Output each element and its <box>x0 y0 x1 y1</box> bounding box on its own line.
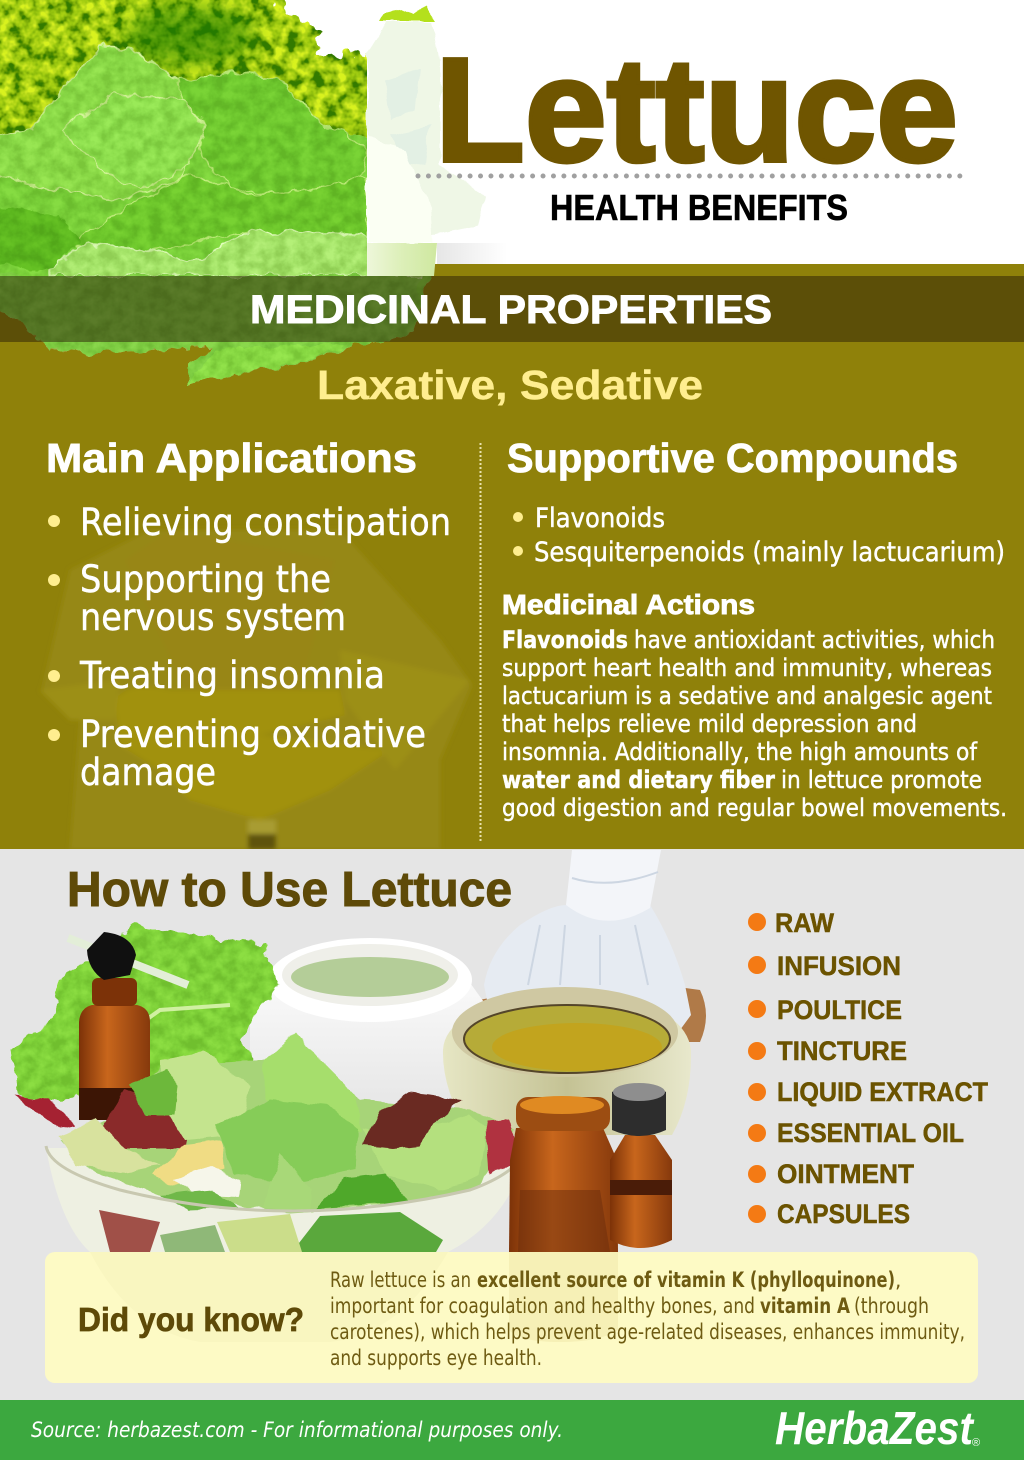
image: woman holding abdomen (faint) <box>40 530 472 849</box>
callout text: important for coagulation and healthy bones, and <box>330 1294 755 1318</box>
item: essential oil: ESSENTIAL OIL <box>777 1118 964 1148</box>
subtitle: HEALTH BENEFITS <box>550 187 848 228</box>
faint salad bowl through callout <box>90 1252 448 1342</box>
medicinal properties panel background <box>0 264 1024 849</box>
applications list: Relieving constipation <box>80 501 451 544</box>
shadow under lettuce <box>437 243 507 264</box>
callout text: and supports eye health. <box>330 1346 542 1370</box>
image: curly lettuce behind <box>0 0 380 160</box>
item: liquid extract: LIQUID EXTRACT <box>777 1077 988 1107</box>
medicinal actions paragraph: insomnia. Additionally, the high amounts of <box>502 738 977 766</box>
glass rim <box>46 1142 528 1211</box>
glass bowl <box>46 1148 528 1252</box>
usage forms list <box>748 908 988 1229</box>
image: dropper bottle <box>68 932 188 1120</box>
heading: main applications: Main Applications <box>46 435 417 481</box>
item: capsules: CAPSULES <box>777 1199 910 1229</box>
medicinal actions paragraph: that helps relieve mild depression and <box>502 710 917 738</box>
panel: how to use background <box>0 849 1024 1400</box>
image: herbal tea bowl <box>443 987 691 1135</box>
callout text <box>330 1268 965 1370</box>
white area right of lettuce <box>438 243 1024 264</box>
logo: HerbaZest: ® <box>972 1437 980 1449</box>
medicinal actions paragraph: Flavonoids <box>502 626 628 654</box>
medicinal actions paragraph: in lettuce promote <box>781 766 982 794</box>
panel: supportive compounds <box>502 435 1007 822</box>
footer bar <box>0 1400 1024 1460</box>
item: poultice: POULTICE <box>777 995 902 1025</box>
properties: Laxative, Sedative <box>317 362 703 408</box>
image: poultice bag in basket <box>479 850 706 1042</box>
source note: Source: herbazest.com - For informational purposes only. <box>31 1418 563 1442</box>
callout text: vitamin A <box>760 1294 851 1318</box>
medicinal actions paragraph: support heart health and immunity, whereas <box>502 654 992 682</box>
applications list: Treating insomnia <box>79 654 385 697</box>
applications list <box>48 501 451 794</box>
medicinal actions paragraph <box>502 626 1007 822</box>
applications list: damage <box>80 751 216 794</box>
image: cream jar <box>250 938 486 1110</box>
panel: main applications <box>46 435 451 794</box>
image: amber essential oil bottle <box>610 1083 672 1248</box>
section heading: MEDICINAL PROPERTIES <box>250 288 772 332</box>
washed-out lettuce under title panel <box>367 243 437 276</box>
curly lettuce dark centre <box>125 5 255 65</box>
image: romaine lettuce <box>0 47 437 383</box>
title: Lettuce <box>435 28 958 193</box>
image: faded lettuce behind title <box>367 22 486 243</box>
image: lettuce leaf <box>12 925 278 1100</box>
callout text: excellent source of vitamin K (phylloquinone) <box>477 1268 895 1292</box>
item: raw <box>748 908 834 938</box>
dotted title divider <box>418 174 960 178</box>
image: amber capsule jar <box>509 1096 618 1252</box>
applications list: Preventing oxidative <box>80 713 426 756</box>
heading: medicinal actions: Medicinal Actions <box>502 589 755 620</box>
salad leaves <box>14 1032 518 1210</box>
callout text: Raw lettuce is an <box>330 1268 471 1292</box>
logo: HerbaZest: HerbaZest <box>775 1402 974 1454</box>
compounds list: Flavonoids <box>535 503 665 534</box>
header background <box>0 0 1024 264</box>
item: ointment: OINTMENT <box>777 1159 914 1189</box>
curly lettuce tip above panel <box>379 6 435 21</box>
applications list: Supporting the <box>80 558 331 601</box>
callout text: , <box>895 1268 901 1292</box>
applications list: nervous system <box>80 596 346 639</box>
compounds list <box>513 503 1005 568</box>
medicinal actions paragraph: water and dietary fiber <box>502 766 775 794</box>
salad base <box>60 1035 515 1212</box>
item: infusion: INFUSION <box>777 951 901 981</box>
section band <box>0 276 1024 342</box>
callout: did you know <box>45 1252 978 1383</box>
heading: how to use: How to Use Lettuce <box>67 863 512 917</box>
callout text: (through <box>854 1294 929 1318</box>
faint jar through callout <box>509 1252 618 1342</box>
heading: supportive compounds: Supportive Compounds <box>507 435 958 481</box>
dotted column divider <box>480 443 482 843</box>
item: tincture: TINCTURE <box>777 1036 907 1066</box>
white title area <box>367 21 1024 243</box>
item: raw: RAW <box>775 908 834 938</box>
callout heading: Did you know? <box>78 1301 304 1338</box>
contents below rim <box>292 1212 443 1252</box>
image: salad bowl <box>14 1032 528 1252</box>
